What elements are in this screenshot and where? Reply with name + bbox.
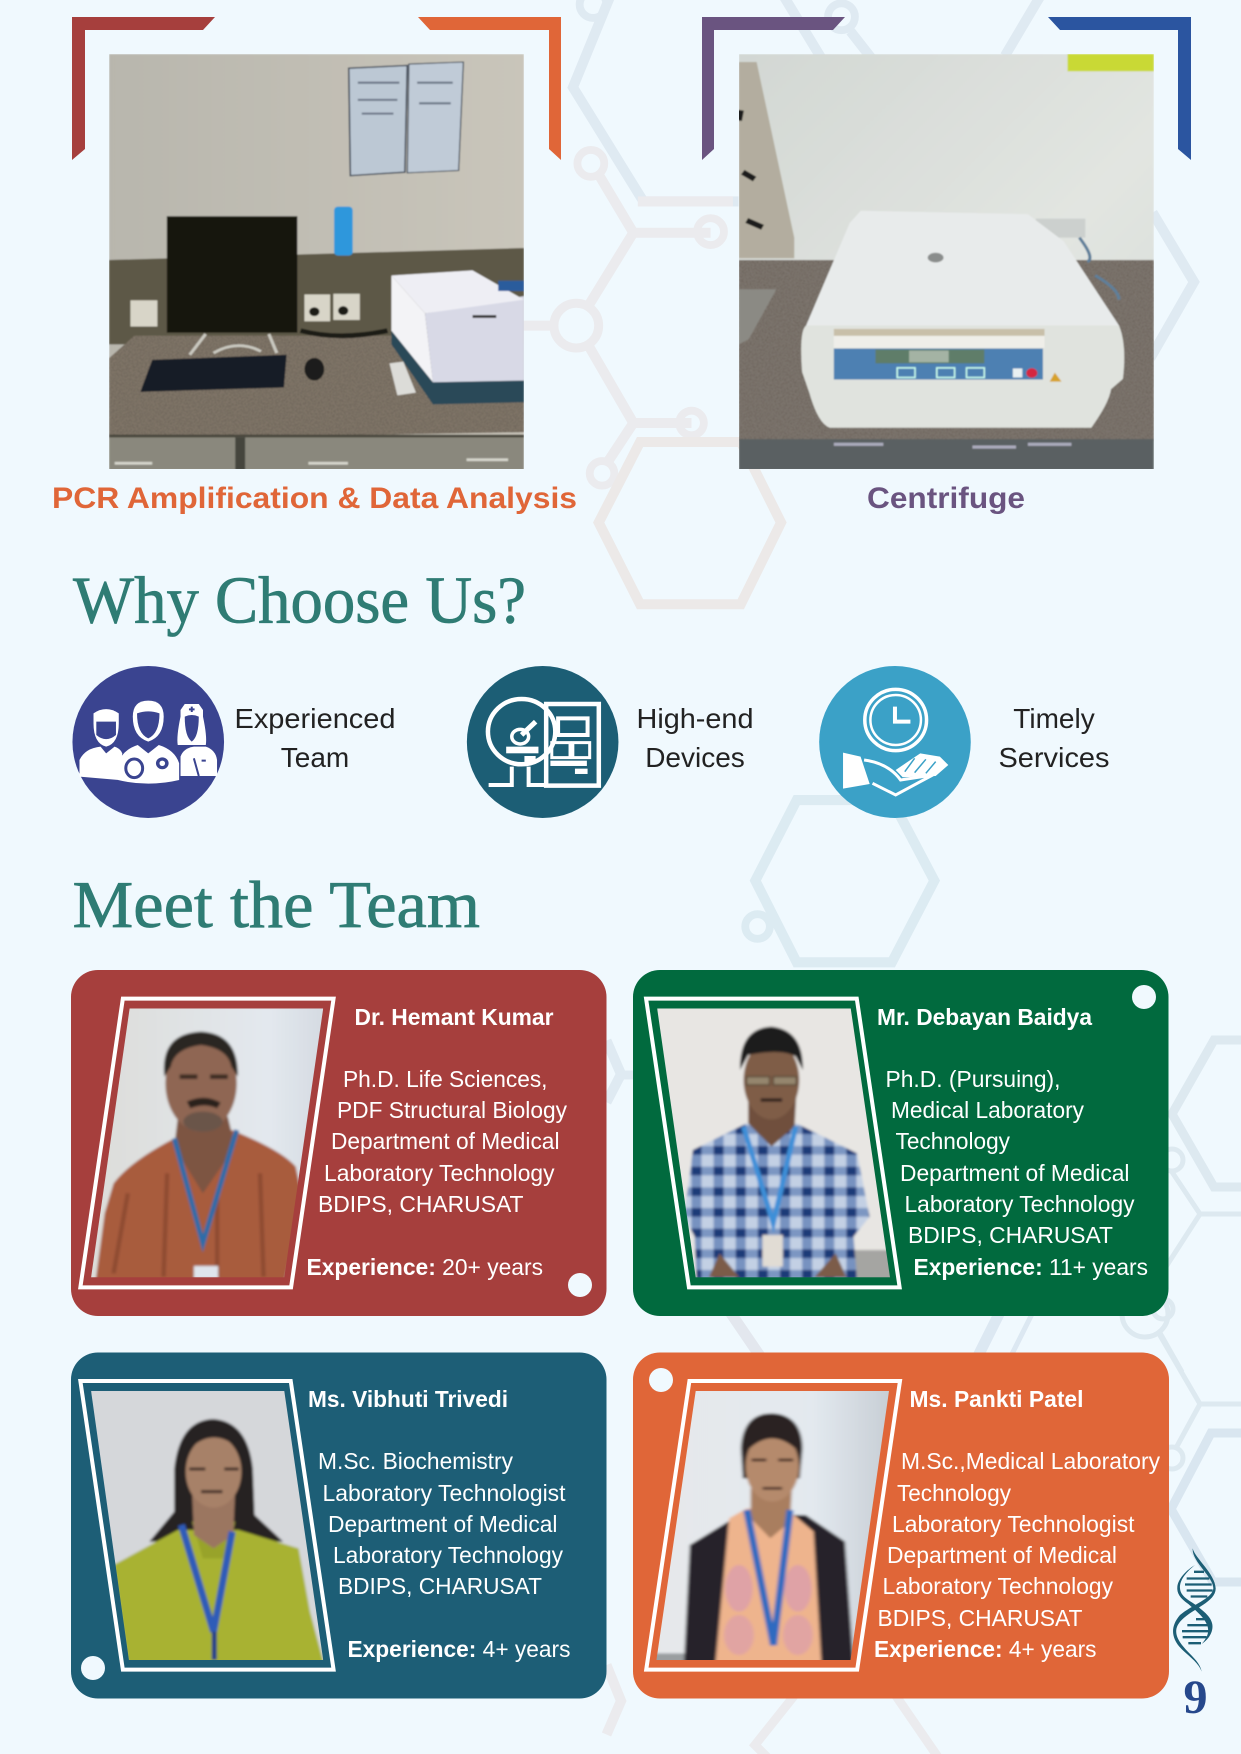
photo frame and portrait xyxy=(80,1381,339,1670)
background hexagon molecule pattern xyxy=(524,0,1241,1754)
details xyxy=(318,1066,567,1217)
details: Laboratory Technologist xyxy=(322,1480,566,1506)
experience: Experience: 11+ years xyxy=(914,1254,1148,1280)
panel: Ms. Pankti Patel xyxy=(633,1352,1169,1698)
label: Timely Services: Services xyxy=(998,742,1110,773)
label: High-end Devices: Devices xyxy=(645,742,745,773)
details: M.Sc.,Medical Laboratory xyxy=(901,1448,1160,1474)
photo frame and portrait xyxy=(646,1381,900,1670)
bracket: photo 1 top-right xyxy=(418,17,561,160)
details: Laboratory Technology xyxy=(333,1542,563,1568)
card background xyxy=(71,970,606,1316)
card background xyxy=(633,970,1168,1316)
details: Technology xyxy=(896,1128,1010,1154)
details: Medical Laboratory xyxy=(891,1097,1084,1123)
details: Department of Medical xyxy=(328,1511,558,1537)
details: Department of Medical xyxy=(887,1542,1117,1568)
feature: experienced team xyxy=(72,666,396,818)
details: Department of Medical xyxy=(331,1128,560,1154)
name: Ms. Pankti Patel xyxy=(910,1386,1084,1412)
label: Experienced Team: Team xyxy=(281,742,349,773)
details: Laboratory Technology xyxy=(324,1160,555,1186)
label: High-end Devices xyxy=(636,703,754,773)
experience: Experience: 4+ years xyxy=(348,1636,570,1662)
icon: medical team xyxy=(72,666,224,818)
caption: PCR Amplification & Data Analysis: PCR Amplification & Data Analysis xyxy=(52,482,577,515)
dot xyxy=(649,1368,673,1392)
details: Laboratory Technology xyxy=(904,1191,1135,1217)
details: M.Sc. Biochemistry xyxy=(318,1448,513,1474)
details: Laboratory Technologist xyxy=(892,1511,1135,1537)
details xyxy=(878,1448,1160,1631)
heading: Meet the Team: Meet the Team xyxy=(72,869,480,942)
caption: Centrifuge: Centrifuge xyxy=(867,482,1025,515)
details: BDIPS, CHARUSAT xyxy=(338,1573,542,1599)
panel: Dr. Hemant Kumar xyxy=(71,970,606,1316)
heading: Why Choose Us?: Why Choose Us? xyxy=(73,564,526,638)
photo frame and portrait xyxy=(646,999,904,1287)
bracket: photo 2 top-right xyxy=(1048,17,1191,160)
page number: 9 xyxy=(1184,1671,1208,1724)
label: High-end Devices: High-end xyxy=(636,703,754,734)
label: Experienced Team xyxy=(234,703,396,773)
name: Mr. Debayan Baidya xyxy=(877,1004,1092,1030)
dot xyxy=(1132,985,1156,1009)
label: Timely Services: Timely xyxy=(1013,703,1095,734)
icon: DNA helix xyxy=(1173,1548,1216,1672)
details: Technology xyxy=(897,1480,1011,1506)
photo: centrifuge xyxy=(739,54,1154,470)
dot xyxy=(81,1656,105,1680)
details: Laboratory Technology xyxy=(882,1573,1113,1599)
details: Ph.D. Life Sciences, xyxy=(343,1066,548,1092)
panel: Mr. Debayan Baidya xyxy=(633,970,1168,1316)
name: Dr. Hemant Kumar xyxy=(354,1004,554,1030)
details xyxy=(886,1066,1135,1248)
bracket: photo 2 top-left xyxy=(702,17,845,160)
panel: Ms. Vibhuti Trivedi xyxy=(71,1352,606,1698)
details: Ph.D. (Pursuing), xyxy=(886,1066,1060,1092)
details: BDIPS, CHARUSAT xyxy=(908,1222,1113,1248)
icon: clock above open hand xyxy=(819,666,971,818)
photo frame and portrait xyxy=(80,999,334,1287)
name: Ms. Vibhuti Trivedi xyxy=(308,1386,508,1412)
experience: Experience: 20+ years xyxy=(306,1254,543,1280)
card background xyxy=(71,1352,606,1698)
feature: high-end devices xyxy=(467,666,754,818)
icon: device with gauge xyxy=(467,666,618,818)
details: BDIPS, CHARUSAT xyxy=(318,1191,524,1217)
experience: Experience: 4+ years xyxy=(874,1636,1096,1662)
bracket: photo 1 top-left xyxy=(72,17,215,160)
label: Timely Services xyxy=(998,703,1110,773)
label: Experienced Team: Experienced xyxy=(234,703,396,734)
details xyxy=(318,1448,566,1599)
feature: timely services xyxy=(819,666,1110,818)
details: Department of Medical xyxy=(900,1160,1130,1186)
details: PDF Structural Biology xyxy=(337,1097,567,1123)
photo: PCR machine and computer xyxy=(109,54,524,470)
card background xyxy=(633,1352,1169,1698)
dot xyxy=(568,1273,592,1297)
details: BDIPS, CHARUSAT xyxy=(878,1605,1082,1631)
